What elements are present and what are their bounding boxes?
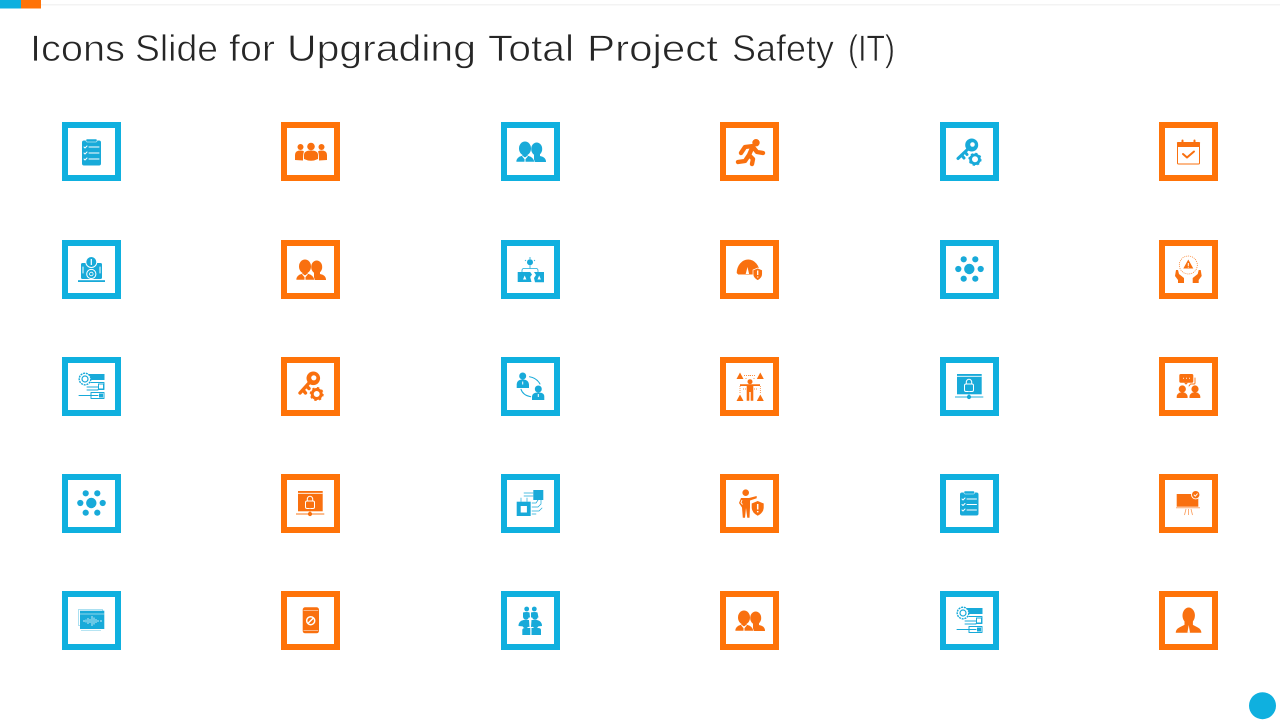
icon tile: calendar check <box>1162 125 1215 178</box>
icon tile: person with warning shield <box>723 477 776 530</box>
icon tile: gauge with warning shield <box>723 243 776 296</box>
icon tile: two people chatting <box>1162 360 1215 413</box>
title: Slide <box>135 28 218 69</box>
icon tile: hub of dots <box>65 477 118 530</box>
icon tile: network screen with lock <box>284 477 337 530</box>
title: for <box>229 28 275 69</box>
icon tile: people exchange <box>504 360 557 413</box>
icon tile: running person <box>723 125 776 178</box>
page number dot <box>1249 692 1276 719</box>
icon tile: server settings <box>943 594 996 647</box>
top accent bars <box>0 0 41 8</box>
icon tile: laptop with coins <box>65 243 118 296</box>
icon tile: single businessman <box>1162 594 1215 647</box>
icon tile: network screen with lock <box>943 360 996 413</box>
icon tile: group of people <box>504 594 557 647</box>
icon tile: two businessmen <box>284 243 337 296</box>
title: Total <box>488 28 574 69</box>
title <box>30 28 895 69</box>
icon tile: two businessmen <box>723 594 776 647</box>
icon tile: two businessmen <box>504 125 557 178</box>
icon tile: key and gear <box>284 360 337 413</box>
icon tile: connected chips <box>504 477 557 530</box>
icon tile: person among risk triangles <box>723 360 776 413</box>
icon tile: clipboard checklist <box>943 477 996 530</box>
icon tile: server settings <box>65 360 118 413</box>
icon tile: audio waveform screen <box>65 594 118 647</box>
icon tile: hub of dots <box>943 243 996 296</box>
icon tile: phone with ban sign <box>284 594 337 647</box>
icon tile: clipboard checklist <box>65 125 118 178</box>
title: Upgrading <box>287 28 476 69</box>
title: (IT) <box>848 28 895 69</box>
icon tile: hands holding warning sign <box>1162 243 1215 296</box>
title: Safety <box>732 28 834 69</box>
title: Icons <box>30 28 125 69</box>
icon tile: presentation board with check <box>1162 477 1215 530</box>
icon tile: team of three <box>284 125 337 178</box>
icon tile: key and gear <box>943 125 996 178</box>
title: Project <box>587 28 719 69</box>
icon tile: idea flow with money bags <box>504 243 557 296</box>
